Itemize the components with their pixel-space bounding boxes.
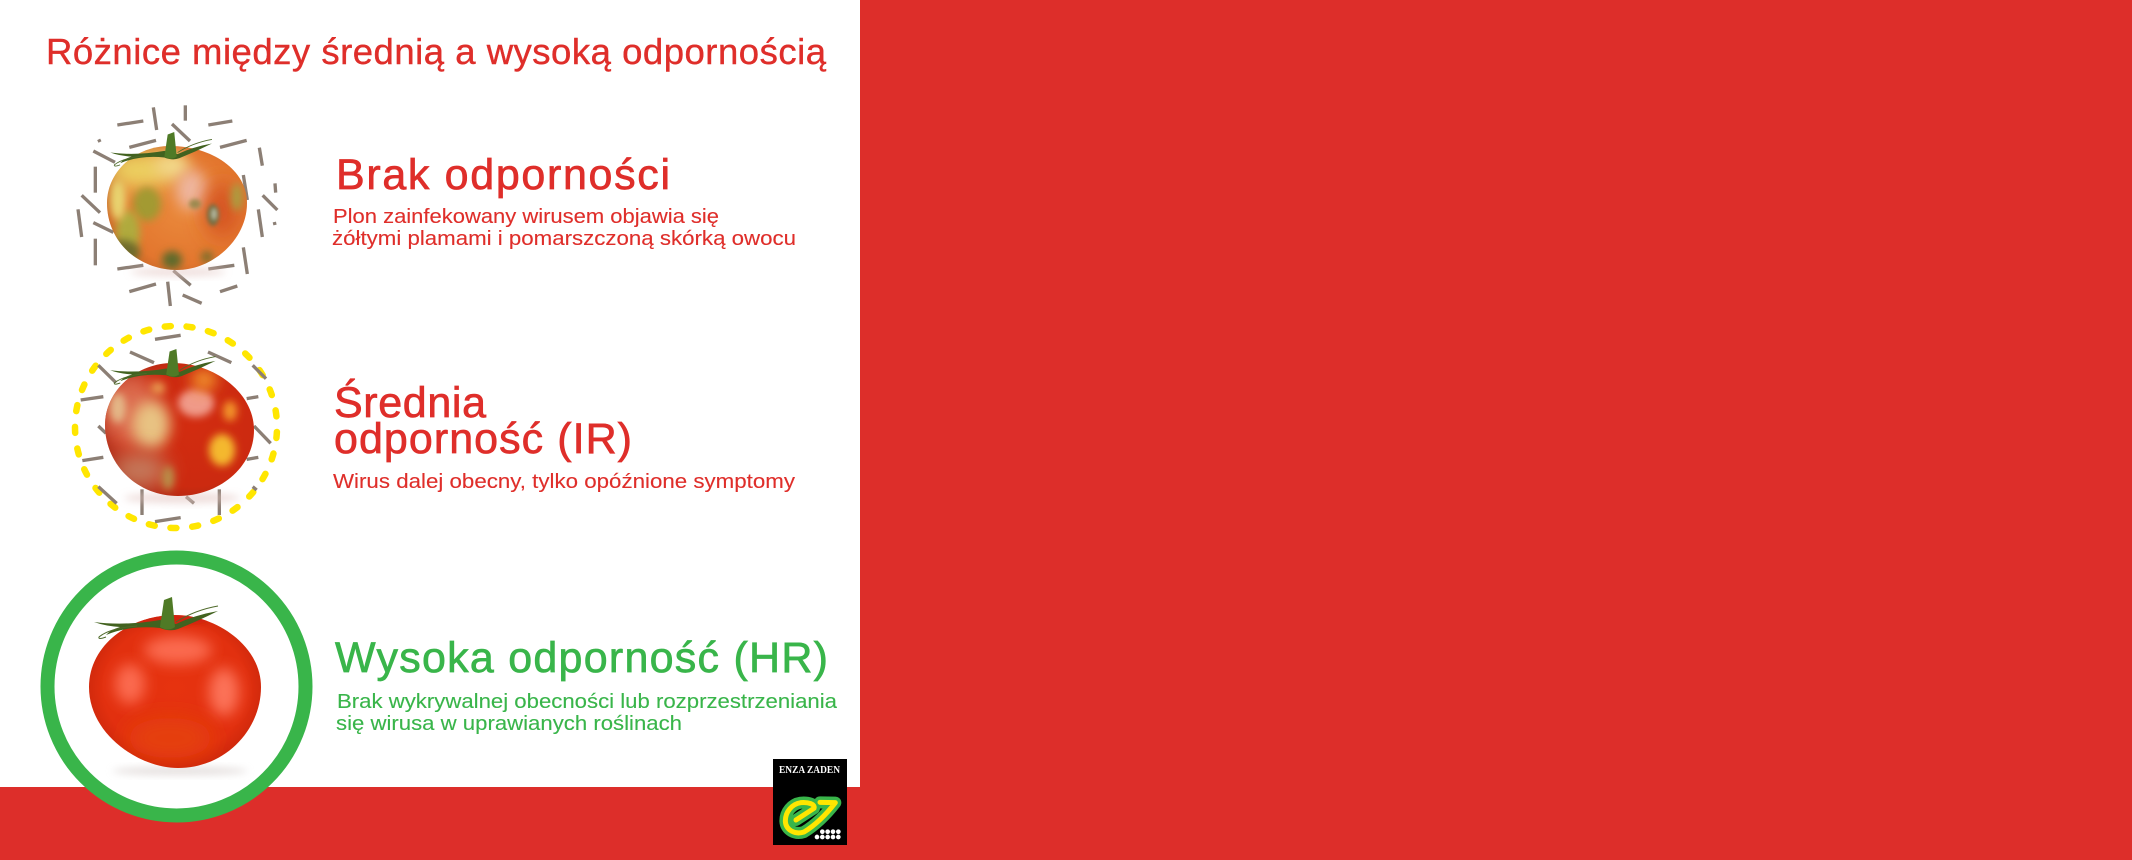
calyx bbox=[110, 349, 216, 384]
title: Różnice między średnią a wysoką odpornością bbox=[46, 31, 827, 72]
description: no resistance: żółtymi plamami i pomarszczoną skórką owocu bbox=[332, 227, 796, 250]
icon: tomato with high resistance bbox=[48, 558, 306, 816]
yellow dashed circle bbox=[75, 326, 277, 528]
heading: intermediate resistance: odporność (IR) bbox=[334, 415, 632, 463]
logo: Enza Zaden: ENZA ZADEN bbox=[779, 764, 840, 776]
description: intermediate resistance: Wirus dalej obecny, tylko opóźnione symptomy bbox=[333, 470, 796, 493]
description: high resistance: się wirusa w uprawianych roślinach bbox=[336, 712, 682, 735]
description: high resistance: Brak wykrywalnej obecności lub rozprzestrzeniania bbox=[337, 690, 838, 713]
heading: intermediate resistance: Średnia bbox=[334, 378, 486, 427]
virus dashes around tomato 2 bbox=[81, 335, 271, 522]
white panel bbox=[0, 0, 860, 787]
virus dashes around tomato 1 bbox=[78, 105, 277, 306]
logo: Enza Zaden bbox=[773, 759, 847, 845]
calyx bbox=[110, 132, 212, 166]
icon: tomato with no resistance bbox=[78, 105, 277, 306]
heading: no resistance: Brak odporności bbox=[336, 151, 670, 199]
description: no resistance: Plon zainfekowany wirusem objawia się bbox=[333, 205, 719, 228]
icon: tomato with intermediate resistance bbox=[75, 326, 277, 528]
heading: high resistance: Wysoka odporność (HR) bbox=[335, 634, 828, 682]
green ring bbox=[48, 558, 306, 816]
calyx bbox=[94, 597, 218, 638]
